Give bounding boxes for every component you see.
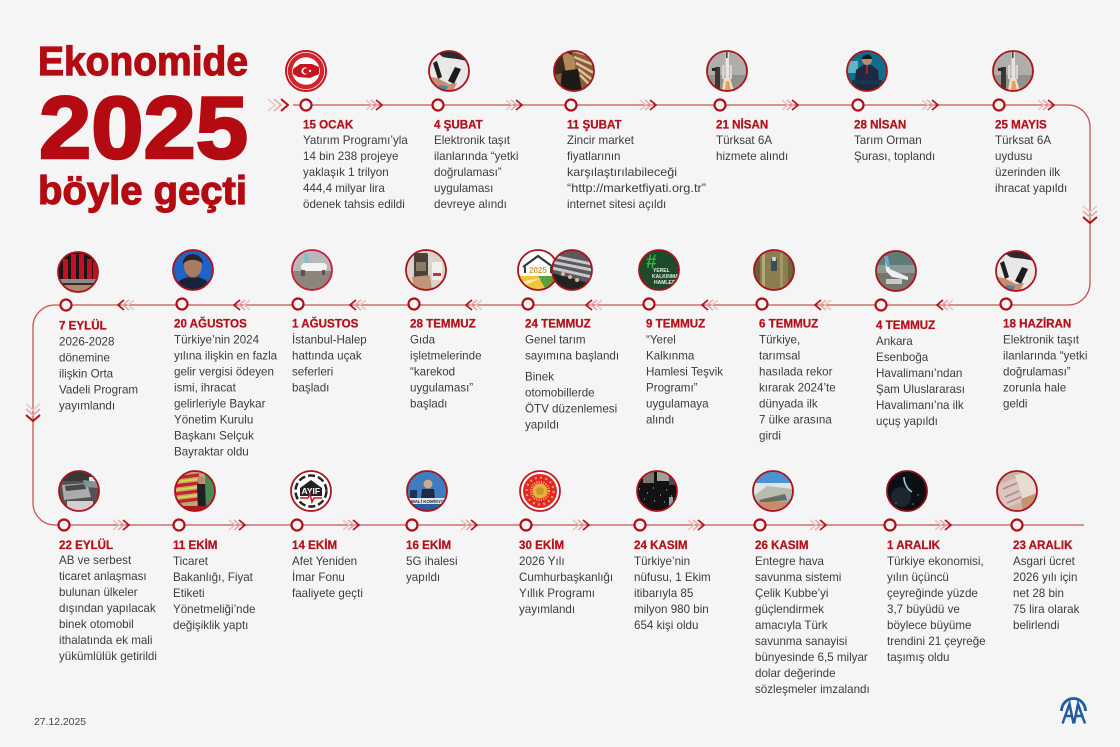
icon: portrait: [173, 250, 213, 290]
event: 1 Ağustos: [292, 250, 367, 394]
event: 24 Temmuz: [518, 250, 619, 432]
event: 4 Temmuz: uçuş yapıldı: [876, 415, 938, 428]
arrows: turn down right: [1083, 206, 1097, 223]
event: 18 Haziran: zorunla hale: [1003, 382, 1066, 394]
event: 26 Kasım: savunma sanayisi: [755, 635, 847, 648]
event: 21 Nisan: hizmete alındı: [716, 150, 788, 163]
event: 4 Temmuz: Esenboğa: [876, 351, 929, 364]
event: 24 Kasım: nüfusu, 1 Ekim: [634, 571, 711, 584]
event: 20 Ağustos: Başkanı Selçuk: [174, 430, 254, 442]
event: 20 Ağustos: [173, 250, 278, 458]
icon: speaker at commission: MALİ KOMİSYON: [411, 498, 448, 504]
event: 30 Ekim: yayımlandı: [519, 603, 575, 616]
event: 1 Aralık: 3,7 büyüdü ve: [887, 603, 960, 616]
icon: AA logo: [1062, 698, 1086, 724]
event: 25 Mayıs: Türksat 6A: [995, 134, 1051, 147]
icon: cars in a row: [552, 250, 592, 290]
event: 23 Aralık: Asgari ücret: [1013, 555, 1076, 568]
event: 23 Aralık: 75 lira olarak: [1013, 603, 1080, 616]
event: 22 Eylül: bulunan ülkeler: [59, 586, 138, 599]
event: 24 Kasım: 654 kişi oldu: [634, 619, 698, 632]
event: 26 Kasım: dolar değerinde: [755, 667, 836, 680]
event: 9 Temmuz: Hamlesi Teşvik: [646, 366, 723, 378]
event: 28 Temmuz: Gıda: [410, 334, 436, 346]
event: 6 Temmuz: [754, 250, 836, 442]
event: 30 Ekim: Cumhurbaşkanlığı: [519, 571, 613, 584]
icon: air defence systems: [753, 471, 793, 511]
event: 1 Ağustos: İstanbul-Halep: [292, 334, 367, 346]
event: 9 Temmuz: [639, 250, 723, 426]
icon: imported cars: [59, 471, 99, 511]
event: 20 Ağustos: Yönetim Kurulu: [174, 414, 253, 426]
event: 18 Haziran: 18 HAZİRAN: [1003, 318, 1071, 330]
event: 25 Mayıs: [993, 51, 1067, 195]
event: 6 Temmuz: 7 ülke arasına: [759, 414, 832, 426]
event: 6 Temmuz: kırarak 2024’te: [759, 382, 836, 394]
event: 4 Şubat: Elektronik taşıt: [434, 134, 511, 147]
date stamp: 27.12.2025: [34, 717, 86, 728]
event: 26 Kasım: sözleşmeler imzalandı: [755, 683, 870, 696]
event: 16 Ekim: 16 EKİM: [406, 539, 451, 552]
icon: crowd: [637, 471, 677, 511]
event: 4 Şubat: [429, 51, 518, 211]
event: 30 Ekim: 30 EKİM: [519, 539, 564, 552]
event: 11 Ekim: Etiketi: [173, 587, 205, 600]
title: Ekonomide: [38, 38, 248, 84]
event: 15 Ocak: 15 OCAK: [303, 118, 354, 132]
event: 4 Temmuz: [876, 251, 965, 428]
event: 1 Aralık: trendini 21 çeyreğe: [887, 635, 986, 648]
event: 1 Ağustos: seferleri: [292, 366, 333, 378]
event: 28 Temmuz: başladı: [410, 398, 447, 410]
event: 24 Temmuz: ÖTV düzenlemesi: [525, 402, 617, 416]
event: 18 Haziran: doğrulaması”: [1003, 366, 1071, 378]
event: 30 Ekim: Yıllık Programı: [519, 587, 595, 600]
event: 28 Nisan: [847, 51, 935, 163]
event: 1 Ağustos: 1 AĞUSTOS: [292, 318, 359, 330]
event: 21 Nisan: [707, 51, 788, 163]
event: 22 Eylül: ithalatında ek mali: [59, 634, 152, 647]
event: 4 Temmuz: Havalimanı’na ilk: [876, 399, 964, 412]
event: 7 Eylül: Vadeli Program: [59, 384, 138, 396]
icon: qr code on a phone: [406, 250, 446, 290]
icon: field from above: [754, 250, 794, 290]
event: 4 Şubat: 4 ŞUBAT: [434, 118, 483, 132]
event: 24 Kasım: [634, 471, 711, 632]
event: 11 Ekim: 11 EKİM: [173, 539, 217, 552]
event: 28 Temmuz: [406, 250, 482, 410]
event: 24 Temmuz: Genel tarım: [525, 334, 586, 346]
event: 25 Mayıs: üzerinden ilk: [995, 166, 1060, 179]
event: 6 Temmuz: dünyada ilk: [759, 398, 818, 410]
event: 4 Şubat: doğrulaması”: [434, 166, 502, 179]
event: 24 Kasım: 24 KASIM: [634, 539, 687, 552]
event: 4 Temmuz: Ankara: [876, 335, 913, 348]
icon: AYIF logo: AYIF: [302, 486, 320, 496]
event: 9 Temmuz: uygulamaya: [646, 398, 709, 410]
event: 24 Kasım: itibarıyla 85: [634, 587, 693, 600]
event: 18 Haziran: Elektronik taşıt: [1003, 334, 1080, 346]
event: 21 Nisan: Türksat 6A: [716, 134, 772, 147]
event: 28 Nisan: Tarım Orman: [854, 134, 922, 147]
event: 9 Temmuz: Kalkınma: [646, 350, 695, 362]
icon: supermarket aisle: [175, 471, 215, 511]
event: 14 Ekim: İmar Fonu: [292, 571, 345, 584]
event: 6 Temmuz: 6 TEMMUZ: [759, 318, 818, 330]
event: 1 Ağustos: hattında uçak: [292, 350, 362, 362]
event: 25 Mayıs: uydusu: [995, 150, 1032, 163]
event: 22 Eylül: binek otomobil: [59, 618, 134, 631]
event: 23 Aralık: belirlendi: [1013, 619, 1059, 632]
icon: market shopper: [554, 51, 594, 91]
event: 24 Temmuz: Binek: [525, 370, 554, 384]
event: 20 Ağustos: yılına ilişkin en fazla: [174, 350, 278, 362]
event: 20 Ağustos: 20 AĞUSTOS: [174, 318, 247, 330]
event: 14 Ekim: 14 EKİM: [292, 539, 337, 552]
event: 22 Eylül: 22 EYLÜL: [59, 539, 113, 552]
event: 1 Aralık: yılın üçüncü: [887, 571, 949, 584]
event: 24 Kasım: milyon 980 bin: [634, 603, 709, 616]
icon: green hashtag badge: [639, 250, 679, 290]
event: 22 Eylül: ticaret anlaşması: [59, 570, 147, 583]
event: 24 Temmuz: 24 TEMMUZ: [525, 318, 591, 330]
event: 1 Aralık: böylece büyüme: [887, 619, 971, 632]
event: 23 Aralık: net 28 bin: [1013, 587, 1064, 600]
event: 1 Ağustos: başladı: [292, 382, 329, 394]
event: 18 Haziran: geldi: [1003, 398, 1028, 410]
event: 6 Temmuz: Türkiye,: [759, 334, 800, 346]
event: 24 Kasım: Türkiye’nin: [634, 555, 690, 568]
icon: green hashtag badge: YEREL: [653, 268, 670, 274]
event: 21 Nisan: 21 NİSAN: [716, 118, 768, 132]
event: 26 Kasım: güçlendirmek: [755, 603, 824, 616]
event: 26 Kasım: savunma sistemi: [755, 571, 841, 584]
event: 26 Kasım: amacıyla Türk: [755, 619, 828, 632]
icon: banknotes: [997, 471, 1037, 511]
event: 11 Şubat: Zincir market: [567, 134, 635, 147]
event: 26 Kasım: Çelik Kubbe’yi: [755, 587, 828, 600]
event: 15 Ocak: yaklaşık 1 trilyon: [303, 166, 389, 179]
event: 11 Şubat: internet sitesi açıldı: [567, 198, 666, 211]
event: 6 Temmuz: girdi: [759, 430, 781, 442]
event: 15 Ocak: ödenek tahsis edildi: [303, 198, 405, 211]
event: 22 Eylül: dışından yapılacak: [59, 602, 156, 615]
icon: rocket: [707, 51, 747, 91]
event: 6 Temmuz: hasılada rekor: [759, 366, 833, 378]
event: 16 Ekim: 5G ihalesi: [406, 555, 458, 568]
timeline path: [33, 105, 1090, 525]
event: 9 Temmuz: alındı: [646, 414, 674, 426]
icon: passenger plane: [292, 250, 332, 290]
icon: presidency seal: [520, 471, 560, 511]
event: 30 Ekim: [519, 471, 613, 616]
icon: plane at airport: [876, 251, 916, 291]
event: 9 Temmuz: 9 TEMMUZ: [646, 318, 705, 330]
icon: green hashtag badge: HAMLESİ: [654, 279, 677, 286]
arrows: row 1: [366, 100, 1054, 110]
title: böyle geçti: [38, 169, 247, 213]
icon: speaker at podium: [847, 51, 887, 91]
event: 26 Kasım: bünyesinde 6,5 milyar: [755, 651, 868, 664]
event: 7 Eylül: 7 EYLÜL: [59, 320, 107, 332]
title: [38, 38, 248, 213]
event: 15 Ocak: Yatırım Programı’yla: [303, 134, 408, 147]
event: 28 Nisan: 28 NİSAN: [854, 118, 906, 132]
event: 20 Ağustos: Bayraktar oldu: [174, 446, 249, 458]
event: 11 Şubat: karşılaştırılabileceği: [567, 166, 677, 179]
event: 16 Ekim: [406, 471, 458, 584]
event: 7 Eylül: 2026-2028: [59, 336, 114, 348]
event: 4 Temmuz: Havalimanı’ndan: [876, 367, 962, 380]
event: 30 Ekim: 2026 Yılı: [519, 555, 565, 568]
event: 7 Eylül: ilişkin Orta: [59, 368, 114, 380]
icon: flags behind a podium: [58, 252, 98, 292]
event: 20 Ağustos: Türkiye’nin 2024: [174, 334, 260, 346]
event: 28 Temmuz: “karekod: [410, 366, 455, 378]
event: 4 Temmuz: Şam Uluslararası: [876, 383, 965, 396]
event: 26 Kasım: Entegre hava: [755, 555, 825, 568]
arrows: row 3: [113, 520, 951, 530]
icon: green hashtag badge: KALKINMA: [652, 274, 679, 280]
event: 7 Eylül: dönemine: [59, 352, 110, 364]
event: 24 Temmuz: yapıldı: [525, 418, 559, 432]
event: 28 Nisan: Şurası, toplandı: [854, 150, 935, 163]
event: 15 Ocak: [286, 51, 408, 211]
event: 7 Eylül: yayımlandı: [59, 400, 115, 412]
event: 11 Ekim: [173, 471, 256, 632]
icon: rocket: [993, 51, 1033, 91]
event: 20 Ağustos: gelirleriyle Baykar: [174, 398, 266, 410]
event: 6 Temmuz: tarımsal: [759, 350, 800, 362]
event: 11 Ekim: değişiklik yaptı: [173, 619, 248, 632]
event: 28 Temmuz: uygulaması”: [410, 382, 473, 394]
event: 25 Mayıs: 25 MAYIS: [995, 118, 1047, 132]
event: 22 Eylül: [58, 471, 157, 663]
event: 22 Eylül: yükümlülük getirildi: [59, 650, 157, 663]
event: 26 Kasım: 26 KASIM: [755, 539, 808, 552]
icon: census logo: [518, 250, 558, 290]
event: 1 Aralık: çeyreğinde yüzde: [887, 587, 978, 600]
event: 9 Temmuz: Programı”: [646, 382, 698, 394]
icon: seal: [286, 51, 326, 91]
event: 11 Şubat: [554, 51, 706, 211]
icon: dark abstract: [887, 471, 927, 511]
event: 14 Ekim: faaliyete geçti: [292, 587, 363, 600]
event: 11 Ekim: Yönetmeliği’nde: [173, 603, 256, 616]
icon: green hashtag badge: #: [646, 252, 657, 273]
event: 4 Şubat: devreye alındı: [434, 198, 507, 211]
icon: census logo: 2025: [529, 266, 547, 275]
event: 24 Temmuz: otomobillerde: [525, 386, 595, 400]
arrows: turn down left: [26, 404, 40, 421]
event: 1 Aralık: 1 ARALIK: [887, 539, 941, 552]
event: 26 Kasım: [753, 471, 870, 696]
event: 20 Ağustos: gelir vergisi ödeyen: [174, 366, 274, 378]
event: 4 Şubat: ilanlarında “yetki: [434, 150, 518, 163]
event: 11 Ekim: Ticaret: [173, 555, 209, 568]
start arrow: [268, 99, 288, 111]
arrows: row 2: [118, 300, 953, 310]
event: 16 Ekim: yapıldı: [406, 571, 440, 584]
event: 15 Ocak: 14 bin 238 projeye: [303, 150, 398, 163]
event: 18 Haziran: ilanlarında “yetki: [1003, 350, 1087, 362]
event: 4 Temmuz: 4 TEMMUZ: [876, 319, 935, 332]
event: 18 Haziran: [996, 251, 1087, 410]
event: 1 Aralık: Türkiye ekonomisi,: [887, 555, 984, 568]
event: 20 Ağustos: ismi, ihracat: [174, 382, 237, 394]
icon: phone in hand: [429, 51, 469, 91]
icon: phone in hand: [996, 251, 1036, 291]
event: 11 Şubat: fiyatlarının: [567, 150, 620, 163]
event: 1 Aralık: [884, 471, 986, 664]
event: 23 Aralık: 23 ARALIK: [1013, 539, 1073, 552]
event: 28 Temmuz: işletmelerinde: [410, 350, 482, 362]
event: 4 Şubat: uygulaması: [434, 182, 493, 195]
event: 15 Ocak: 444,4 milyar lira: [303, 182, 385, 195]
event: 11 Ekim: Bakanlığı, Fiyat: [173, 571, 254, 584]
event: 7 Eylül: [58, 252, 138, 412]
event: 25 Mayıs: ihracat yapıldı: [995, 182, 1067, 195]
event: 11 Şubat: 11 ŞUBAT: [567, 118, 622, 132]
event: 28 Temmuz: 28 TEMMUZ: [410, 318, 476, 330]
event: 11 Şubat: “http://marketfiyati.org.tr”: [567, 182, 706, 195]
event: 9 Temmuz: “Yerel: [646, 334, 676, 346]
event: 23 Aralık: 2026 yılı için: [1013, 571, 1077, 584]
event: 22 Eylül: AB ve serbest: [59, 554, 132, 567]
event: 23 Aralık: [997, 471, 1080, 632]
event: 1 Aralık: taşımış oldu: [887, 651, 950, 664]
event: 24 Temmuz: sayımına başlandı: [525, 350, 619, 362]
title: 2025: [39, 78, 248, 177]
event: 14 Ekim: Afet Yeniden: [292, 555, 357, 568]
event: 14 Ekim: [291, 471, 363, 600]
